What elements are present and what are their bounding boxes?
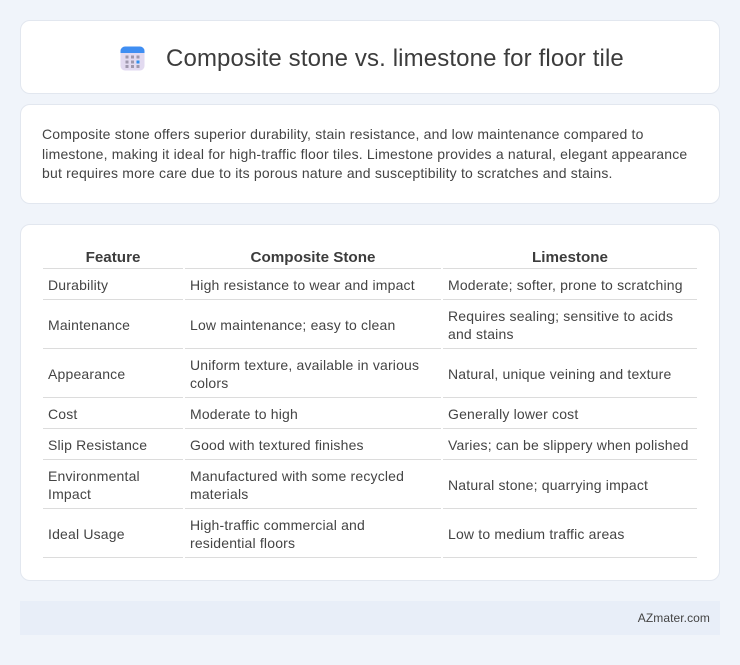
table header: Limestone [532, 249, 608, 266]
row: appearance [48, 357, 671, 391]
row: maintenance: Maintenance [48, 317, 130, 333]
row: environmental impact: Manufactured with some recycled [190, 468, 404, 484]
intro paragraph: but requires more care due to its porous nature and susceptibility to scratches and stains. [42, 165, 613, 181]
row: maintenance: Low maintenance; easy to clean [190, 317, 395, 333]
row: maintenance [48, 308, 673, 342]
row: appearance: Uniform texture, available in various [190, 357, 419, 373]
row: ideal usage: High-traffic commercial and [190, 517, 365, 533]
row: cost: Generally lower cost [448, 406, 578, 422]
intro paragraph: Composite stone offers superior durability, stain resistance, and low maintenance compared to [42, 126, 644, 142]
row: appearance: Natural, unique veining and texture [448, 366, 671, 382]
table header: Feature [86, 249, 140, 266]
row: cost [48, 406, 578, 422]
row: durability: Durability [48, 277, 108, 293]
title: Composite stone vs. limestone for floor tile [166, 45, 624, 72]
icon: calendar [120, 46, 144, 70]
row: environmental impact: materials [190, 486, 248, 502]
footer source: AZmater.com [638, 611, 710, 625]
table header [86, 249, 608, 266]
row: slip resistance [48, 437, 689, 453]
row: environmental impact: Natural stone; quarrying impact [448, 477, 648, 493]
row: slip resistance: Varies; can be slippery when polished [448, 437, 689, 453]
row: durability: High resistance to wear and impact [190, 277, 415, 293]
row: ideal usage: Ideal Usage [48, 526, 125, 542]
row: cost: Cost [48, 406, 78, 422]
row: durability [48, 277, 683, 293]
row: appearance: colors [190, 375, 228, 391]
intro paragraph: limestone, making it ideal for high-traffic floor tiles. Limestone provides a natural, elegant appearance [42, 146, 687, 162]
title card [20, 20, 720, 94]
row: maintenance: Requires sealing; sensitive to acids [448, 308, 673, 324]
row: environmental impact [48, 468, 648, 502]
row: slip resistance: Slip Resistance [48, 437, 147, 453]
table header: Composite Stone [251, 249, 375, 266]
footer bar [20, 601, 720, 635]
row: environmental impact: Environmental [48, 468, 140, 484]
row: ideal usage [48, 517, 625, 551]
intro paragraph [42, 126, 687, 181]
row: ideal usage: Low to medium traffic areas [448, 526, 625, 542]
intro text panel [20, 104, 720, 204]
comparison table panel [20, 224, 720, 581]
row: ideal usage: residential floors [190, 535, 295, 551]
row: environmental impact: Impact [48, 486, 91, 502]
row: cost: Moderate to high [190, 406, 298, 422]
row: slip resistance: Good with textured finishes [190, 437, 364, 453]
row: maintenance: and stains [448, 326, 514, 342]
row: appearance: Appearance [48, 366, 125, 382]
row: durability: Moderate; softer, prone to scratching [448, 277, 683, 293]
